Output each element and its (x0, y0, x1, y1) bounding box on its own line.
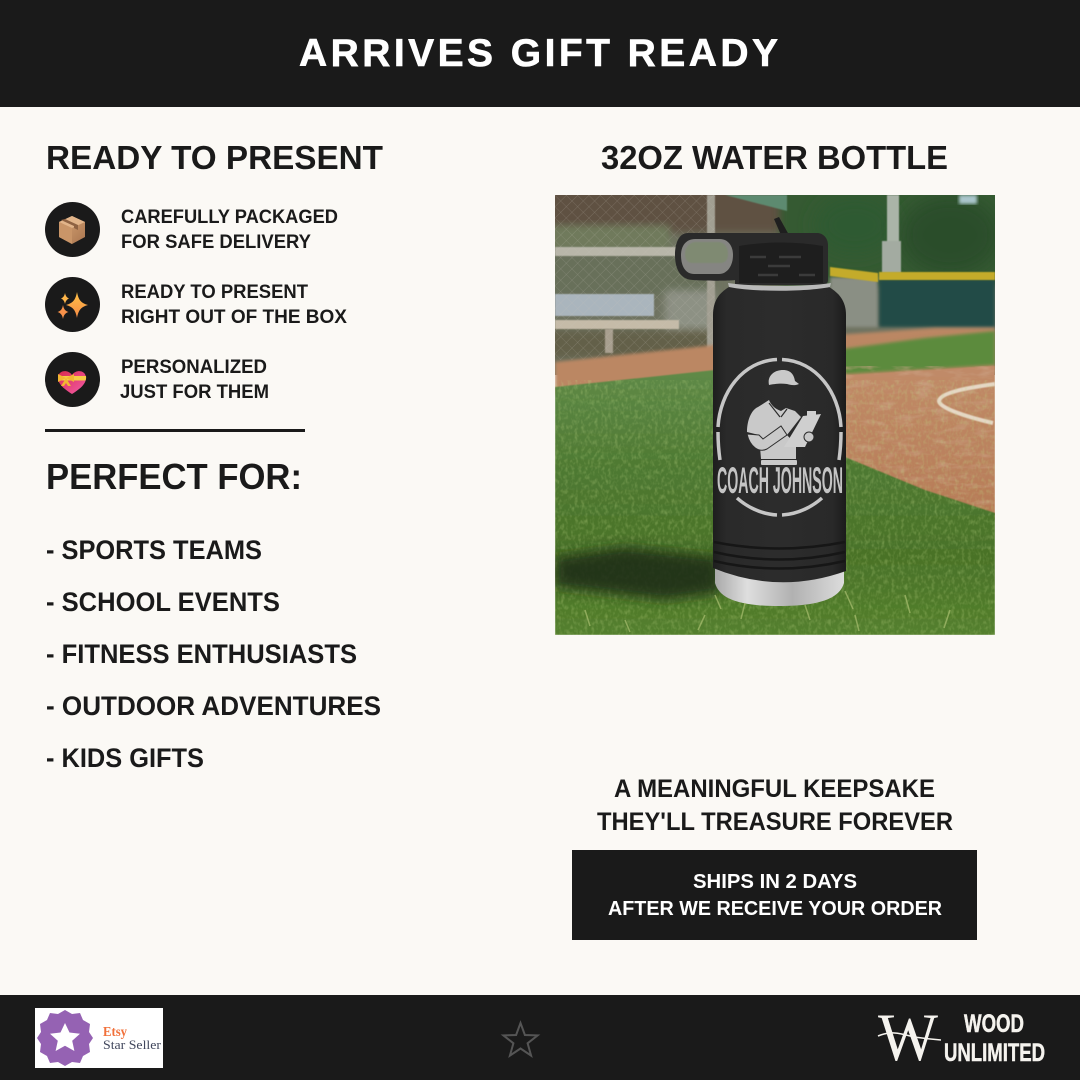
list: audiences: - SPORTS TEAMS (46, 535, 262, 565)
coach belt (761, 460, 797, 465)
bottle body (713, 287, 846, 582)
shipping callout (572, 850, 977, 940)
badge label: Star Seller (103, 1037, 162, 1052)
text: personalized: PERSONALIZED (121, 356, 267, 378)
bottle shadow (555, 547, 720, 600)
infield dirt texture (846, 366, 995, 512)
coach whistle strap (769, 403, 787, 417)
list: audiences: - SCHOOL EVENTS (46, 587, 280, 617)
shipping callout: AFTER WE RECEIVE YOUR ORDER (608, 898, 943, 920)
text: personalized: JUST FOR THEM (120, 381, 269, 403)
heading: perfect for: PERFECT FOR: (46, 456, 302, 497)
heading: ready to present: READY TO PRESENT (46, 139, 383, 176)
benefit: ready to present (45, 277, 347, 332)
benefit: personalized (45, 352, 269, 407)
title: ARRIVES GIFT READY (299, 32, 778, 75)
badge icon: purple seal with star (37, 1010, 93, 1066)
bottle steel base (715, 568, 844, 606)
infield dirt (835, 366, 995, 520)
footer bar (0, 995, 1080, 1080)
icon: sparkles (45, 277, 100, 332)
text: carefully packaged: FOR SAFE DELIVERY (121, 231, 311, 253)
tagline: THEY'LL TREASURE FOREVER (597, 808, 953, 836)
heading: product name: 32OZ WATER BOTTLE (601, 139, 948, 176)
badge: etsy star seller (35, 1008, 163, 1068)
text: carefully packaged: CAREFULLY PACKAGED (121, 206, 338, 228)
coach torso (747, 400, 801, 459)
icon: gift heart (45, 352, 100, 407)
product photo: engraved water bottle on baseball field (545, 185, 1005, 635)
coach clipboard (790, 414, 821, 447)
far grass and dirt (555, 328, 995, 395)
foreground grass (555, 370, 995, 635)
front grass blades (585, 591, 950, 632)
engraved logo (717, 360, 843, 515)
shipping callout: SHIPS IN 2 DAYS (693, 871, 857, 893)
logo monogram W: W (878, 999, 939, 1075)
logo wordmark: WOOD (964, 1010, 1024, 1038)
list: audiences: - KIDS GIFTS (46, 743, 204, 773)
grass texture (555, 380, 995, 635)
logo wordmark: UNLIMITED (944, 1039, 1045, 1067)
photo background (545, 185, 1005, 375)
icon: package (45, 202, 100, 257)
logo figure: coach with clipboard (747, 370, 821, 465)
chalk line (939, 384, 995, 423)
text: ready to present: READY TO PRESENT (121, 281, 308, 303)
bottle cap and handle (675, 233, 828, 285)
coach forearm (747, 426, 787, 450)
product photo: engraved water bottle on baseball field: COACH JOHNSON (717, 460, 843, 501)
list: audiences: - OUTDOOR ADVENTURES (46, 691, 381, 721)
panel: perfect for (46, 456, 388, 773)
list: audiences: - FITNESS ENTHUSIASTS (46, 639, 357, 669)
logo: wood unlimited (878, 999, 1045, 1075)
bottle grooves (714, 542, 845, 568)
coach cap (769, 370, 799, 385)
bottle neck ring (728, 283, 831, 291)
text: ready to present: RIGHT OUT OF THE BOX (121, 306, 347, 328)
water bottle (675, 217, 846, 606)
panel: ready to present (45, 139, 383, 407)
header banner (0, 0, 1080, 107)
coach hand (804, 432, 814, 442)
logo ring (718, 360, 841, 515)
icon: star outline (503, 1023, 538, 1056)
benefit: carefully packaged (45, 202, 338, 257)
badge label: Etsy (103, 1025, 127, 1040)
tagline: A MEANINGFUL KEEPSAKE (614, 775, 935, 803)
bottle straw (774, 217, 788, 233)
